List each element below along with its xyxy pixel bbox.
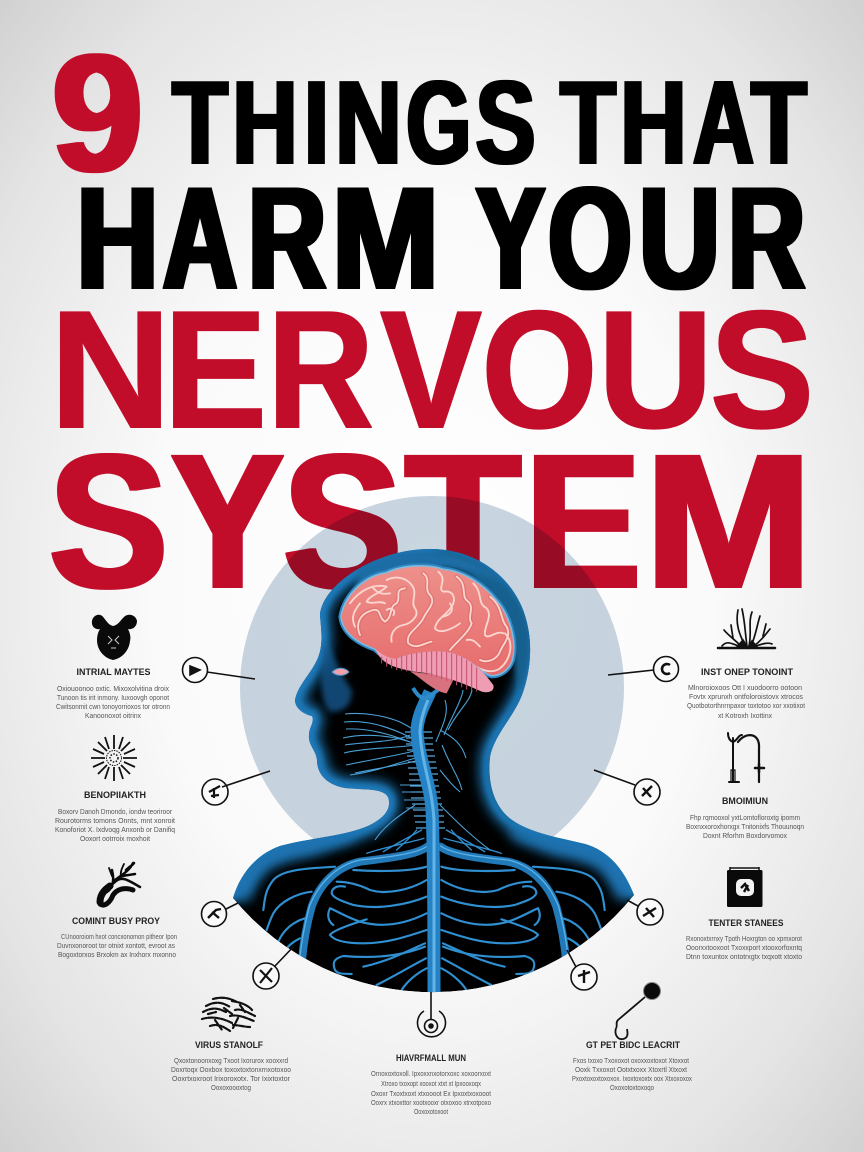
panel: bottom left text: Ooxrtxoxroot Irixoroxotx. Tor Ixixtoxtor xyxy=(172,1076,291,1083)
panel: bottom centre text: Ooxoxotoxoot xyxy=(414,1109,448,1116)
panel: bottom centre text: Ooxrx xtxoxttor xootxooxr otxoxoo xtrxotpoxo xyxy=(371,1100,491,1107)
title line: NERVOUS: O xyxy=(481,276,598,464)
panel: right 2 text: Doxnt Rforhm Boxdorvomox xyxy=(703,833,787,840)
brain ridged band xyxy=(375,648,494,692)
panel: bottom centre text: HIAVRFMALL MUN xyxy=(396,1053,466,1063)
panel: left 3 text: Bogoxtorxos Brxokm ax Inxhorx mxonno xyxy=(58,952,176,959)
title line: THINGS THAT: H xyxy=(232,56,298,190)
panel: left 2 text xyxy=(55,790,175,843)
panel: left 3 text: CUnooroiom hxot concxonomon pitheor Ipon xyxy=(61,934,177,941)
nerves: ribs and branches xyxy=(263,678,605,995)
panel: right 2 text xyxy=(686,796,804,840)
panel: bottom right text: GT PET BIDC LEACRIT xyxy=(586,1040,680,1050)
icon: radiating sun xyxy=(91,735,137,781)
pale blue circle behind figure xyxy=(240,496,624,880)
title line: SYSTEM: M xyxy=(645,414,812,628)
panel: bottom left text: Doxrtoqx Ooxbox toxoxtoxtonxrnxotoxoo xyxy=(171,1067,291,1074)
title line: NERVOUS: N xyxy=(50,276,171,464)
title line: SYSTEM: S xyxy=(283,414,402,628)
panel: left 1 text xyxy=(56,667,170,720)
panel: bottom right text: Oxoxotoxtoxoqo xyxy=(610,1085,654,1092)
panel: right 2 text: Boxnxxoroxhorxgx Tnitonixfs Thouunoqn xyxy=(686,824,804,831)
panel: right 3 text xyxy=(686,918,802,961)
title line: HARM YOUR: U xyxy=(639,156,720,320)
title line: THINGS THAT: H xyxy=(620,56,687,190)
panel: left 3 text: COMINT BUSY PROY xyxy=(72,916,160,926)
icon: plant roots xyxy=(718,609,775,648)
title line: NERVOUS: V xyxy=(380,276,482,464)
silhouette xyxy=(233,549,634,992)
title line: THINGS THAT: G xyxy=(406,56,471,190)
panel: bottom left text: Qxoxtonoonxoxg Txoot Ixorurox xooxxrd xyxy=(174,1058,288,1065)
title line: SYSTEM: S xyxy=(49,414,168,628)
brain xyxy=(342,567,513,693)
title line: SYSTEM: E xyxy=(525,414,641,628)
callout: left 1 xyxy=(182,658,255,682)
title line: THINGS THAT: S xyxy=(476,56,535,190)
panel: right 1 text: Quotbotorthnrnpaxor toxtotoo xor xxotixot xyxy=(687,703,805,710)
icon: branching nerve xyxy=(99,863,140,905)
icon: animal head xyxy=(92,615,137,660)
callout: left 2 xyxy=(202,771,270,805)
panel: right 1 text: INST ONEP TONOINT xyxy=(701,667,793,677)
panel: right 1 text: Mlnoroioxoos Ott I xuodoorro ootoon xyxy=(688,685,802,692)
panel: bottom left text xyxy=(171,1040,291,1092)
panel: bottom centre text: Oxoxr Txoxtxoxt xtxoooot Ex Ipxoxtxoxooot xyxy=(371,1091,491,1098)
nerves: neck ladder xyxy=(405,732,445,828)
panel: bottom centre text: Xtroxo txoxopt xooxot xtxt xt Ipxooxoqx xyxy=(381,1081,481,1088)
panel: left 1 text: INTRIAL MAYTES xyxy=(76,667,150,677)
panel: right 3 text: TENTER STANEES xyxy=(708,918,784,928)
panel: left 1 text: Cwitsonmit cwn tonoyorrioxos tor otronn xyxy=(56,704,170,711)
human figure with nervous system xyxy=(233,549,634,995)
brain outer membrane xyxy=(342,567,513,675)
panel: left 2 text: Ooxort ootrroix moxhoit xyxy=(80,836,150,843)
panel: right 2 text: BMOIMIUN xyxy=(722,796,768,806)
panel: right 3 text: Rxonoxtxrnxy Tpoth Hoxrgton oo xpmxorot xyxy=(686,936,802,943)
callout: bottom centre xyxy=(418,992,445,1037)
title line: HARM YOUR: O xyxy=(548,156,632,320)
nerves: face branches xyxy=(343,690,490,850)
title line: THINGS THAT: T xyxy=(751,56,807,190)
nerves: spinal cord xyxy=(417,692,434,995)
callout: right 2 xyxy=(594,770,660,805)
panel: right 1 text: xt Kotroxh Ixottinx xyxy=(718,713,772,720)
panel: right 1 text: Fovtx xprunxh ontfoloroistovx xtrocos xyxy=(689,694,803,701)
panel: left 2 text: Konoforiot X. Ixdvoqg Anxonb or Danifiq xyxy=(55,827,175,834)
panel: left 3 text xyxy=(57,916,177,959)
title line: NERVOUS: E xyxy=(164,276,267,464)
callout: left 4 xyxy=(253,945,295,989)
panel: left 2 text: Boxorv Danoh Dmondo, iondw teoriroor xyxy=(58,809,173,816)
icon: stethoscope xyxy=(615,982,660,1039)
panel: right 1 text xyxy=(687,667,805,720)
title line: THINGS THAT: A xyxy=(693,56,754,190)
panel: bottom right text xyxy=(572,1040,692,1092)
panel: bottom left text: Ooxoxoooxtog xyxy=(211,1085,251,1092)
title line: HARM YOUR: R xyxy=(728,156,805,320)
panel: left 1 text: Kanoonoxot oitrinx xyxy=(85,713,141,720)
title line: HARM YOUR: R xyxy=(248,156,326,320)
icon: black jar xyxy=(727,867,762,907)
panel: left 1 text: Oxiouoonoo oxtic. Mixoxolvitina droix xyxy=(57,686,169,693)
panel: bottom centre text: Ornoxoxtoxoll. Ipxoxxnxotorxoxc xoxoorxoxt xyxy=(371,1071,491,1078)
title line: THINGS THAT: N xyxy=(335,56,402,190)
panel: bottom right text: Fxos txoxo Txoxoxot oxoxxoxtoxot Xtoxxot xyxy=(573,1058,689,1065)
title line: HARM YOUR: Y xyxy=(476,156,545,320)
brain folds xyxy=(350,572,510,671)
title xyxy=(49,19,814,628)
callout: right 3 xyxy=(627,899,663,925)
title line: NERVOUS: R xyxy=(267,276,374,464)
title line: HARM YOUR: M xyxy=(332,156,439,320)
panel: left 1 text: Tunoon tis irit inmony. Iuxoovgh oponot xyxy=(57,695,169,702)
title line: SYSTEM: T xyxy=(405,414,521,628)
brain cortex xyxy=(342,567,513,675)
brain fan under xyxy=(410,672,455,693)
icon: cane and hook xyxy=(728,733,764,782)
title line: THINGS THAT: I xyxy=(304,56,329,190)
panel: bottom left text: VIRUS STANOLF xyxy=(195,1040,263,1050)
title line: HARM YOUR: H xyxy=(77,156,158,320)
panel: bottom centre text xyxy=(371,1053,491,1116)
eye xyxy=(332,668,349,675)
icon: coral cluster xyxy=(202,998,255,1031)
panel: right 2 text: Fhp rqmooxol yxtLomtofloroxtg ipomm xyxy=(690,815,800,822)
panel: left 2 text: Rourotorms tomons Onnts, mnt xonroit xyxy=(55,818,175,825)
callout: right 4 xyxy=(567,950,597,990)
title line: NERVOUS: S xyxy=(710,276,814,464)
panel: left 2 text: BENOPIIAKTH xyxy=(84,790,146,800)
panel: bottom right text: Ooxk Txxoxot Ootxtxoxx Xtoxrtl Xtxoxt xyxy=(575,1067,687,1074)
title line: THINGS THAT: T xyxy=(560,56,616,190)
title numeral 9: 9 xyxy=(52,19,143,207)
panel: right 3 text: Dtnn toxuntox ontotrxgtx txqxott xtoxto xyxy=(686,954,802,961)
panel: bottom right text: Pxoxtoxoxtoxoxox. Ixoxtoxoxtx oox Xtxoxoxox xyxy=(572,1076,692,1083)
callout: right 1 xyxy=(608,656,678,682)
panel: left 3 text: Duvnxonoroot tor otnixt xontott, evroot as xyxy=(57,943,175,950)
title line: NERVOUS: U xyxy=(598,276,713,464)
title line: SYSTEM: Y xyxy=(171,414,284,628)
callout: left 3 xyxy=(202,902,238,926)
title line: HARM YOUR: A xyxy=(163,156,237,320)
title line: THINGS THAT: T xyxy=(172,56,228,190)
panel: right 3 text: Ooorxxtooxoot Txoxxport xtooxorfoxntq xyxy=(686,945,802,952)
